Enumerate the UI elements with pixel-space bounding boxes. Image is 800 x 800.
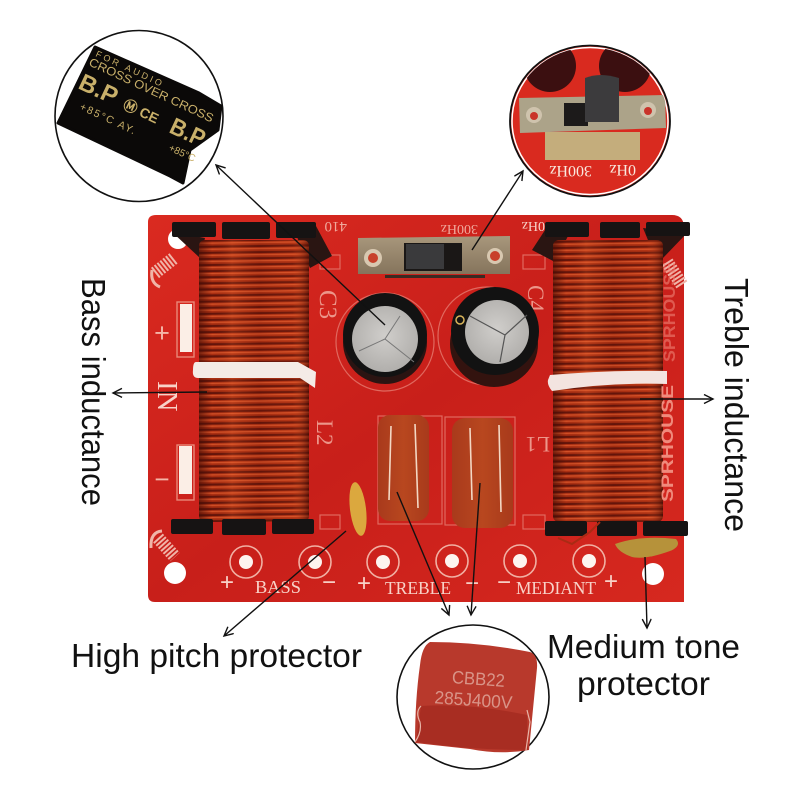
printed capacitor text: +85°C AY. (78, 101, 137, 137)
capacitor value: 285J400V (434, 687, 513, 713)
treble inductor coil (532, 222, 690, 544)
coil lead wire (558, 522, 600, 544)
callout circle: electrolytic capacitor (55, 30, 223, 202)
slider (404, 243, 462, 271)
printed capacitor text: B.P (165, 113, 210, 153)
brand text beside coil: SPRHOUSE (658, 385, 677, 502)
switch frequency labels: 0Hz (609, 161, 636, 178)
cable tie (548, 371, 667, 391)
silkscreen: board labels: 410 (324, 218, 347, 234)
copper winding (199, 240, 309, 522)
silkscreen: board labels: + (154, 318, 170, 348)
silkscreen: board labels: IN (151, 381, 183, 412)
silkscreen: board labels: + (357, 570, 371, 597)
printed capacitor text: +85°C (167, 143, 197, 165)
yellow ceramic capacitor: medium tone protector (615, 538, 678, 558)
arrow: capacitor to callout (216, 165, 385, 325)
screw marks (151, 258, 682, 557)
board outline (148, 215, 684, 602)
silkscreen: board labels: − (154, 464, 170, 494)
silkscreen: board labels: L1 (526, 432, 550, 457)
capacitor body (58, 47, 221, 183)
circuit board (148, 215, 690, 602)
callout circle: film capacitor (397, 625, 549, 769)
brand text beside coil (658, 262, 679, 502)
arrow: bass coil to label (113, 392, 207, 393)
silkscreen: board labels: + (604, 568, 618, 595)
yellow ceramic capacitor: high pitch protector (347, 481, 369, 537)
printed capacitor text: CROSS OVER CROSS (87, 55, 216, 125)
bass inductor coil (171, 222, 332, 535)
switch frequency labels: 300Hz (549, 162, 592, 179)
printed capacitor text: FOR AUDIO (94, 49, 164, 88)
solder pads (230, 545, 605, 578)
silkscreen: board labels: L2 (312, 420, 337, 446)
silkscreen: board labels: C3 (314, 290, 341, 319)
silkscreen: board labels (151, 218, 618, 598)
silkscreen outlines (320, 255, 545, 529)
switch frequency labels (550, 165, 636, 176)
silkscreen: board labels: 300Hz (441, 221, 478, 236)
top bobbin flange (172, 226, 332, 268)
film capacitor close-up (415, 642, 537, 752)
mounting holes (164, 229, 664, 585)
silkscreen: board labels: C4 (523, 285, 548, 312)
cable tie (193, 362, 316, 388)
film capacitor right (452, 418, 513, 528)
label: treble inductance: Treble inductance (718, 278, 755, 532)
printed capacitor text: B.P (74, 69, 122, 110)
slide switch (358, 236, 510, 278)
copper winding (553, 240, 663, 522)
switch close-up (519, 40, 666, 179)
arrow: treble coil to label (640, 398, 713, 400)
silkscreen: board labels: − (497, 569, 511, 596)
top bobbin flange (532, 227, 687, 262)
arrow: yellow capacitor to high pitch label (224, 531, 346, 636)
label: medium tone protector (547, 628, 740, 702)
electrolytic capacitor C4 (450, 287, 539, 387)
mounting rivets (364, 249, 382, 267)
label: medium tone protector: Medium tone (547, 628, 740, 665)
printed capacitor text: Ⓜ CE (121, 96, 161, 127)
brand text beside coil: SPRHOUSE (660, 262, 679, 362)
arrow: medium tone capacitor to label (645, 557, 647, 628)
label: high pitch protector: High pitch protector (71, 637, 362, 674)
arrow: switch to callout (472, 171, 523, 250)
film capacitor left (378, 415, 429, 521)
label: bass inductance: Bass inductance (75, 278, 112, 506)
silkscreen: board labels: + (220, 569, 234, 596)
silkscreen: board labels: − (465, 570, 479, 597)
bottom bobbin flange (171, 519, 314, 535)
electrolytic capacitor C3 (343, 293, 427, 384)
callout circle: slide switch (510, 40, 670, 196)
silkscreen: board labels: BASS (255, 577, 301, 597)
silkscreen: board labels: TREBLE (385, 578, 451, 598)
label: medium tone protector: protector (577, 665, 710, 702)
printed capacitor text (74, 49, 216, 165)
silkscreen: input slots (177, 302, 194, 500)
silkscreen: board labels: MEDIANT (516, 578, 596, 598)
arrow: right film capacitor to callout (471, 483, 480, 615)
capacitor marking: CBB22 (451, 667, 506, 691)
arrow: left film capacitor to callout (397, 492, 449, 615)
silkscreen: board labels: − (322, 569, 336, 596)
bottom bobbin flange (545, 521, 688, 536)
silkscreen: board labels: 0Hz (522, 218, 545, 233)
switch plate (358, 236, 510, 274)
